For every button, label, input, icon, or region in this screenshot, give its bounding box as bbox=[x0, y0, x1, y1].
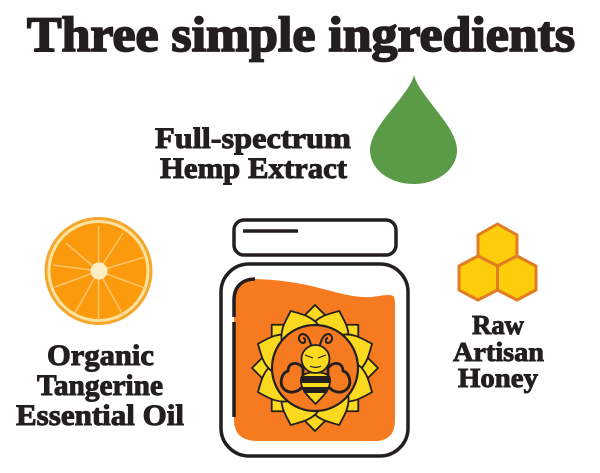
jar bbox=[221, 220, 408, 456]
icon: green hemp extract drop bbox=[370, 75, 457, 184]
label: hemp extract: Hemp Extract bbox=[160, 152, 347, 185]
icon: orange slice bbox=[44, 217, 152, 325]
label: honey: Artisan bbox=[453, 337, 544, 367]
label: honey: Raw bbox=[472, 310, 524, 340]
label: tangerine oil bbox=[16, 339, 184, 432]
bee face bbox=[305, 355, 326, 368]
label: honey bbox=[453, 310, 544, 393]
bee wings bbox=[281, 363, 350, 392]
sun petals bbox=[250, 303, 380, 433]
bee stripes bbox=[301, 376, 330, 393]
logo: sun and bee bbox=[250, 303, 380, 433]
bee head bbox=[302, 345, 330, 373]
title: Three simple ingredients bbox=[27, 6, 575, 62]
honey fill bbox=[234, 279, 395, 441]
label: hemp extract: Full-spectrum bbox=[155, 122, 351, 155]
bee antennae bbox=[299, 334, 332, 348]
label: tangerine oil: Organic bbox=[47, 339, 154, 372]
jar lid bbox=[234, 220, 396, 255]
jar body bbox=[221, 264, 408, 456]
label: tangerine oil: Tangerine bbox=[37, 369, 163, 402]
label: honey: Honey bbox=[458, 363, 539, 393]
bee body bbox=[301, 372, 330, 404]
label: hemp extract bbox=[155, 122, 351, 185]
jar highlight bbox=[234, 279, 255, 417]
icon: honeycomb bbox=[459, 224, 536, 300]
label: tangerine oil: Essential Oil bbox=[16, 399, 184, 432]
sun disc bbox=[272, 325, 358, 411]
